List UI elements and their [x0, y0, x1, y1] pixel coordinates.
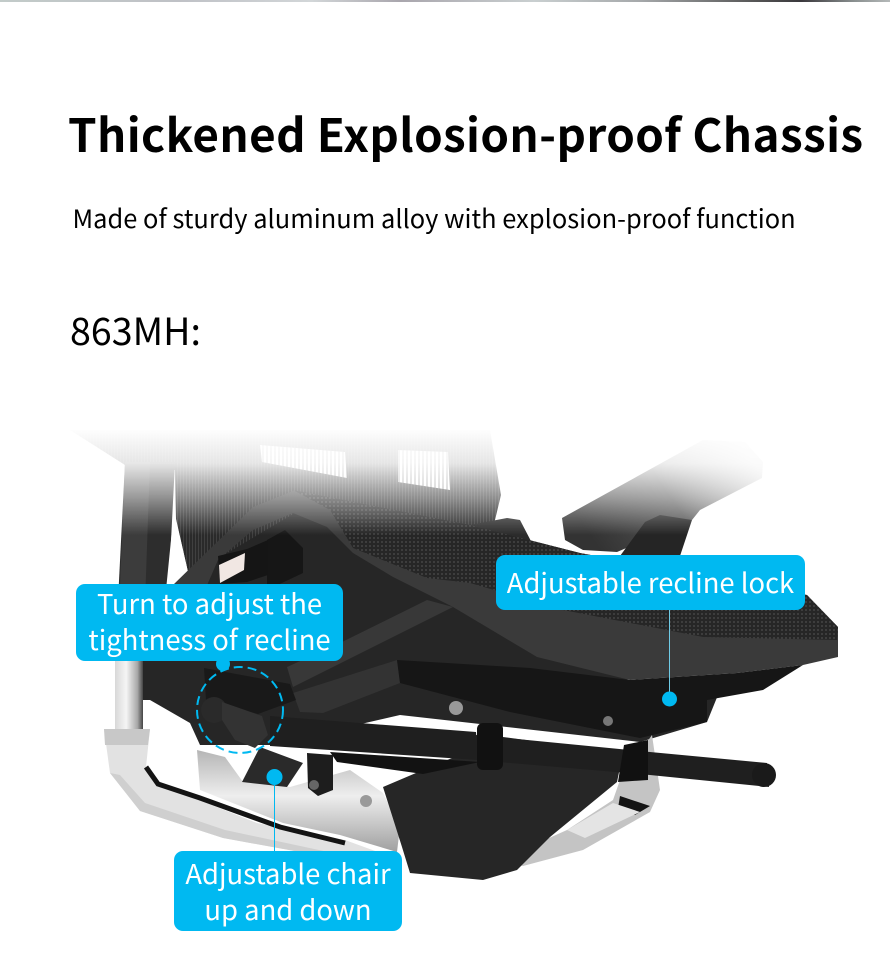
connector: recline lock	[662, 610, 677, 706]
under-frame mechanism block	[267, 530, 303, 590]
backrest white gap	[166, 510, 188, 590]
title: Thickened Explosion-proof Chassis	[68, 100, 864, 166]
chrome central casting	[197, 750, 400, 852]
bar and clamps	[270, 716, 776, 787]
back mesh	[70, 430, 501, 640]
casting opening	[232, 745, 260, 778]
base dark edge line	[146, 767, 345, 843]
connector: chair height	[266, 769, 282, 852]
chrome base right loop	[500, 735, 660, 866]
seat frame rim	[173, 491, 838, 680]
model label: 863MH:	[70, 301, 201, 356]
top photo strip	[0, 0, 890, 2]
seat plate	[397, 660, 803, 738]
chrome upright	[115, 660, 143, 735]
bolts	[309, 701, 613, 807]
subtitle: Made of sturdy aluminum alloy with explosion-proof function	[72, 200, 796, 236]
armrest	[562, 440, 763, 556]
lower mechanism body	[383, 737, 623, 880]
callout: recline tightness: Turn to adjust the	[97, 582, 322, 622]
callout: chair height	[174, 851, 402, 931]
lift lever	[242, 747, 303, 787]
callout: recline tightness: tightness of recline	[88, 618, 331, 658]
callout: recline lock	[496, 555, 805, 610]
callout: recline lock: Adjustable recline lock	[507, 561, 794, 601]
rear seat cushion	[470, 518, 533, 545]
dashed focus circle	[197, 657, 283, 753]
chrome base left loop	[104, 729, 400, 860]
seat plate face	[293, 660, 400, 713]
seat underside housing	[143, 510, 720, 745]
frame wing	[287, 600, 453, 687]
lever bracket	[307, 753, 333, 796]
strut	[330, 752, 480, 774]
callout: chair height: Adjustable chair	[185, 852, 391, 892]
seat mesh	[293, 490, 838, 640]
callout: chair height: up and down	[204, 888, 372, 928]
top fade	[0, 428, 890, 535]
callout: recline tightness	[76, 584, 343, 661]
recline label tag	[218, 540, 268, 584]
knob	[201, 697, 268, 748]
backrest upright	[115, 462, 175, 660]
